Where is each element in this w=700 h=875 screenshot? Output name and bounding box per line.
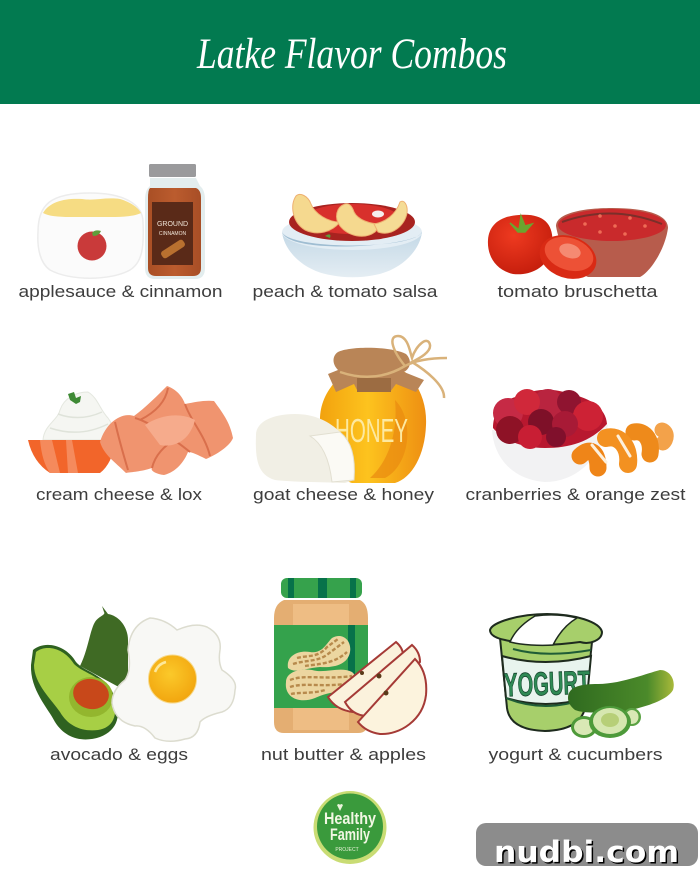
- icon: cream cheese bowl: [28, 392, 116, 473]
- icon: honey jar: HONEY: [335, 412, 408, 449]
- icon: goat cheese: [256, 414, 354, 483]
- label: cranberries & orange zest: [466, 486, 686, 504]
- label: peach & tomato salsa: [252, 283, 438, 301]
- panel: tomato bruschetta: [488, 208, 668, 301]
- icon: fried egg: [112, 618, 235, 741]
- logo: Healthy Family Project: Family: [330, 825, 370, 844]
- label: avocado & eggs: [50, 746, 188, 764]
- icon: cranberry bowl: [492, 389, 608, 482]
- label: applesauce & cinnamon: [18, 283, 223, 301]
- label: nut butter & apples: [261, 746, 426, 764]
- panel: applesauce and cinnamon: [18, 164, 223, 301]
- icon: peanut butter jar: [274, 578, 368, 733]
- watermark: nudbi.com: [476, 823, 698, 870]
- icon: yogurt cup: YOGURT: [504, 663, 591, 703]
- panel: goat cheese and honey: [253, 336, 447, 504]
- icon: yogurt cup: [490, 614, 602, 731]
- icon: apple slices: [328, 642, 426, 734]
- icon: cinnamon jar: CINNAMON: [159, 231, 186, 237]
- icon: cinnamon jar: [145, 164, 205, 279]
- icon: salsa bowl: [282, 194, 422, 277]
- logo: Healthy Family Project: Healthy: [324, 809, 376, 828]
- logo: Healthy Family Project: PROJECT: [335, 847, 359, 853]
- panel: cream cheese and lox: [28, 386, 233, 504]
- panel: cranberries and orange zest: [466, 389, 686, 504]
- icon: applesauce bowl: [38, 193, 143, 278]
- panel: peach and tomato salsa: [252, 194, 438, 301]
- icon: tomato half: [534, 228, 602, 286]
- label: cream cheese & lox: [36, 486, 203, 504]
- label: tomato bruschetta: [498, 283, 658, 301]
- watermark: nudbi.com: nudbi.com: [496, 836, 680, 870]
- icon: avocado: [31, 606, 128, 739]
- icon: terracotta bowl: [556, 208, 668, 277]
- title: Latke Flavor Combos: [196, 31, 507, 78]
- icon: honey jar: [320, 336, 447, 483]
- header banner: [0, 0, 700, 104]
- icon: orange peel: [580, 430, 666, 468]
- logo: Healthy Family Project: [314, 791, 386, 864]
- label: goat cheese & honey: [253, 486, 435, 504]
- watermark: nudbi.com: nudbi.com: [494, 835, 679, 869]
- icon: cinnamon jar: GROUND: [157, 221, 188, 228]
- panel: avocado and eggs: [31, 606, 235, 764]
- icon: smoked salmon: [100, 386, 233, 475]
- icon: whole tomato: [488, 215, 553, 274]
- icon: peanuts: [286, 636, 356, 700]
- label: yogurt & cucumbers: [488, 746, 662, 764]
- panel: nut butter and apples: [261, 578, 426, 764]
- icon: cucumbers: [568, 670, 674, 738]
- panel: yogurt and cucumbers: [488, 614, 674, 764]
